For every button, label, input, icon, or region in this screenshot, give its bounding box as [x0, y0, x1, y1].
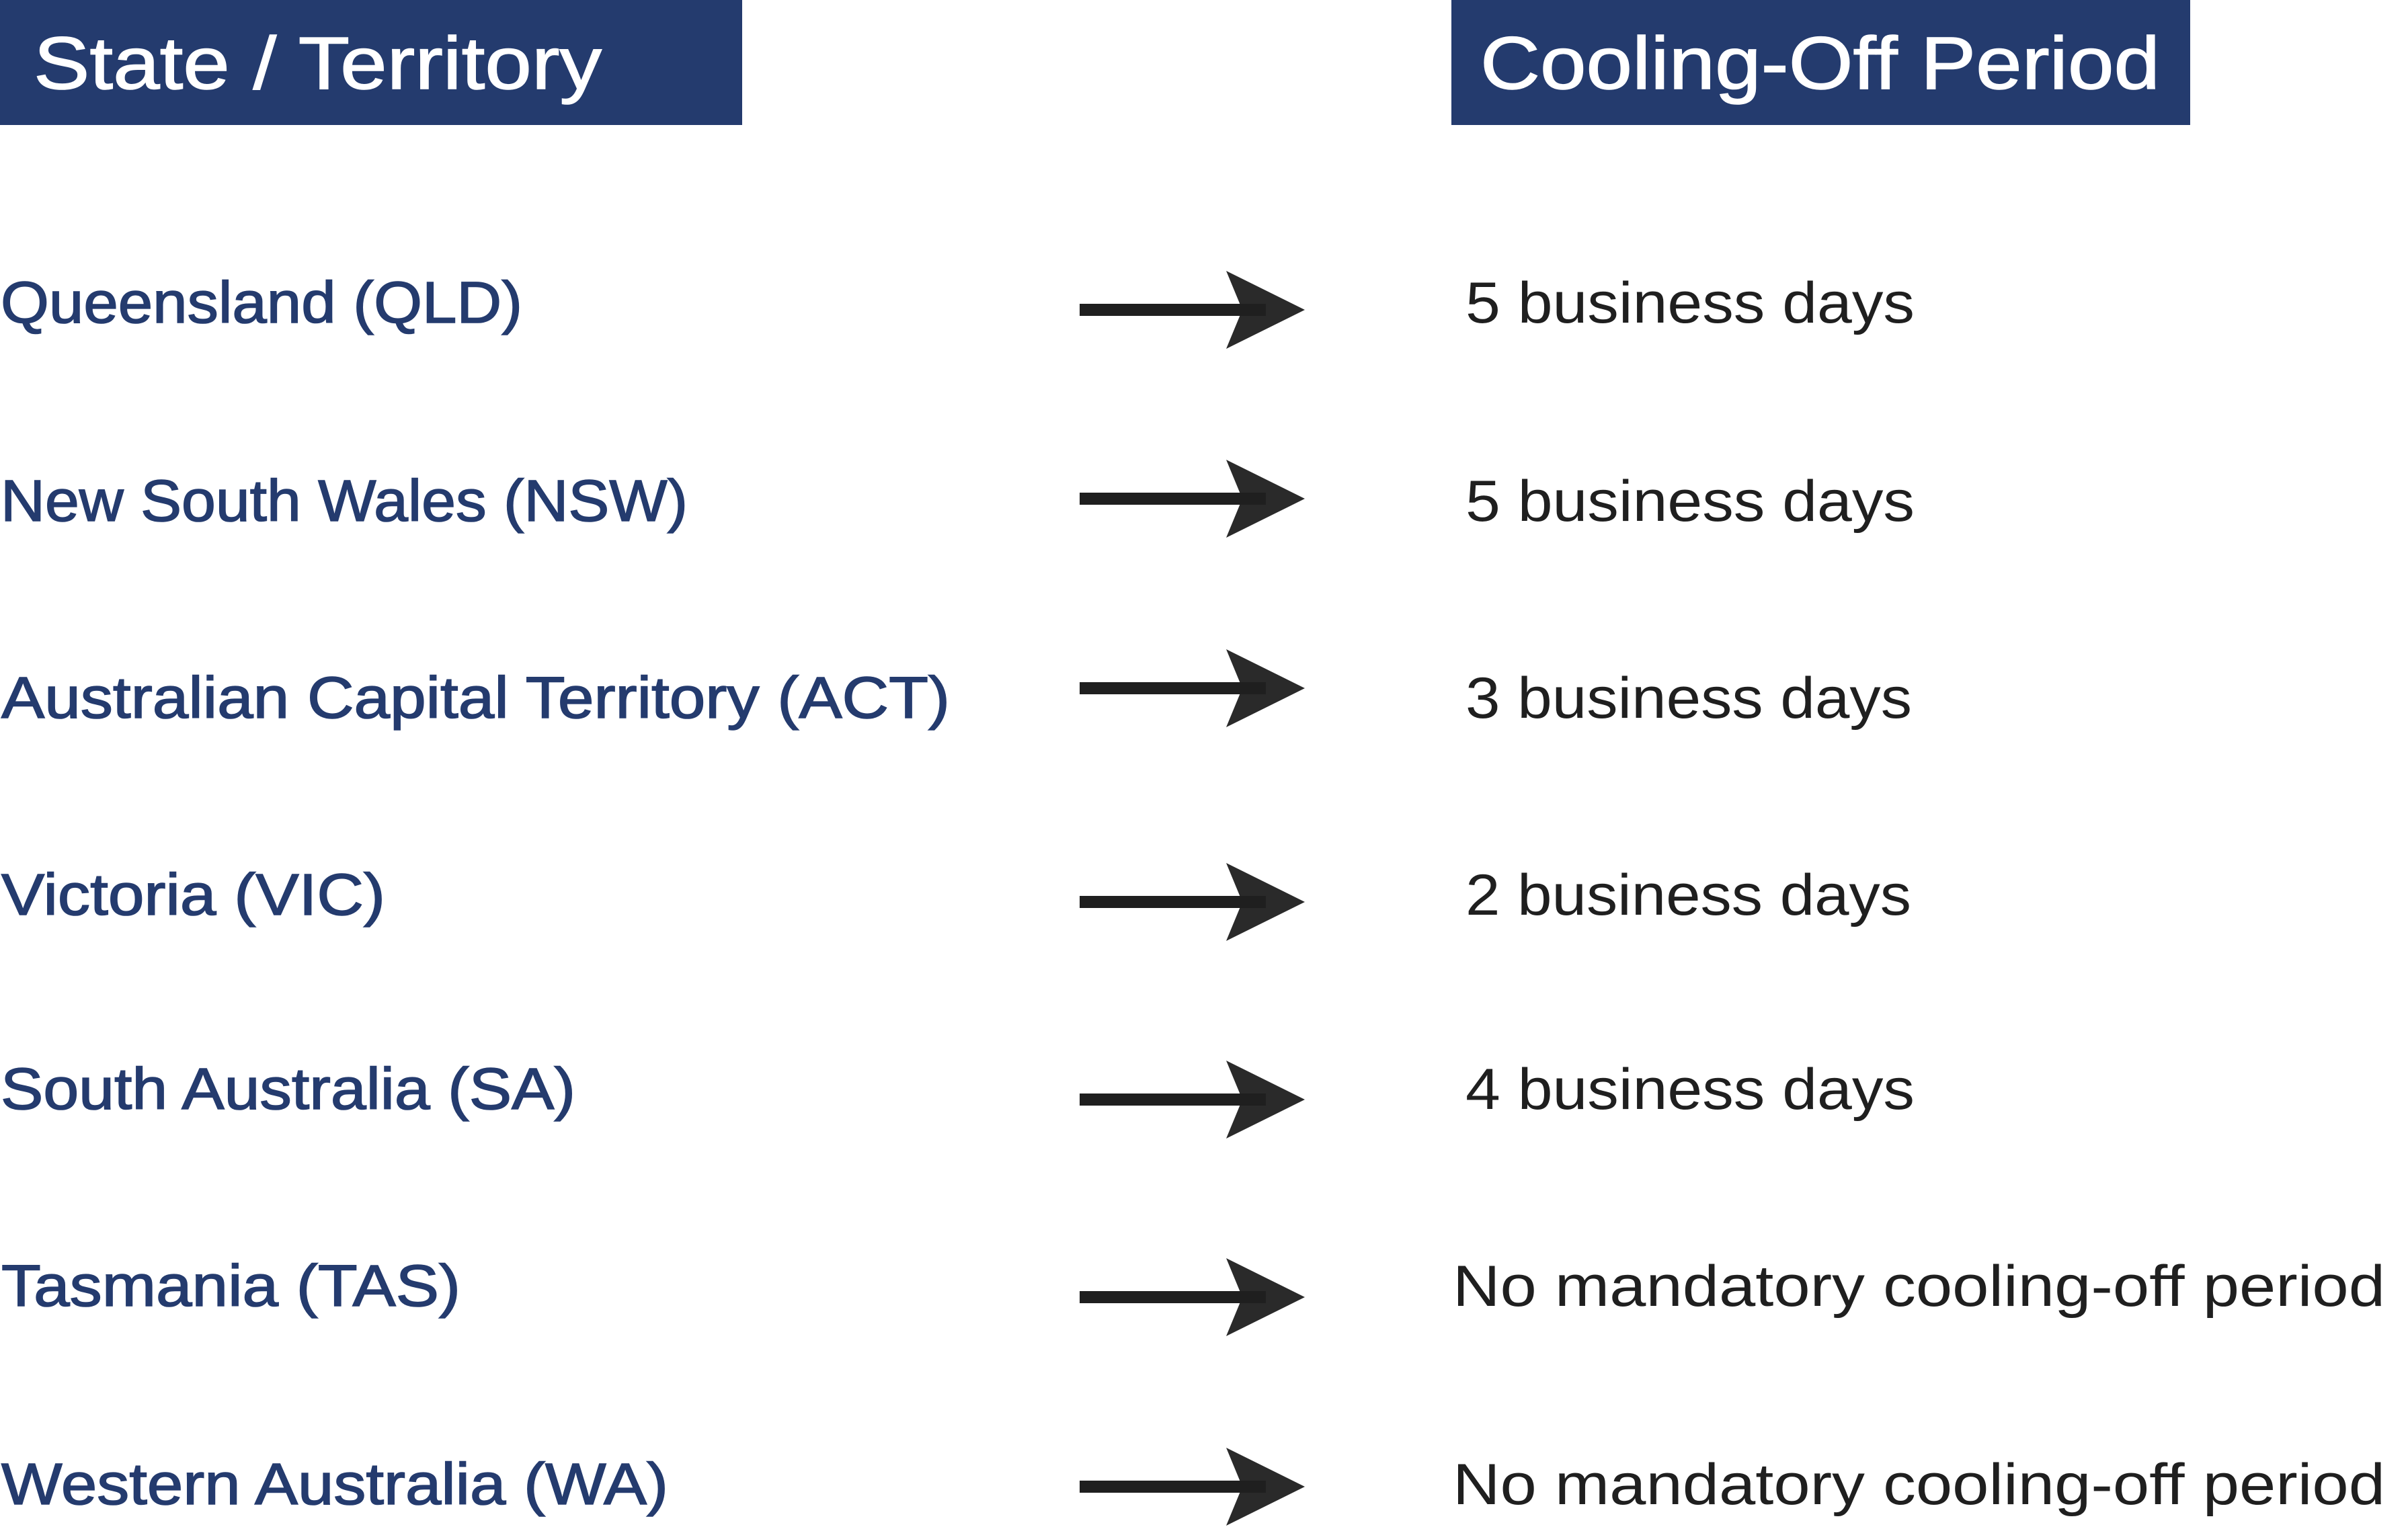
header: Cooling-Off Period — [1451, 0, 2190, 125]
header: Cooling-Off Period: Cooling-Off Period — [1480, 22, 2160, 105]
period: 5 business days: 5 business days — [1466, 469, 1915, 534]
row: New South Wales — [1, 460, 1915, 538]
period: No mandatory cooling-off period: No mandatory cooling-off period — [1453, 1452, 2385, 1517]
arrow: Australian Capital Territory — [1080, 649, 1305, 727]
period: 5 business days: 5 business days — [1466, 271, 1915, 335]
row: Queensland — [1, 270, 1915, 349]
row: South Australia — [1, 1057, 1915, 1139]
arrow: South Australia — [1080, 1061, 1305, 1139]
arrow: Western Australia — [1080, 1448, 1305, 1526]
row: Western Australia — [1, 1448, 2385, 1526]
arrow: Tasmania — [1080, 1258, 1305, 1336]
arrow: New South Wales — [1080, 460, 1305, 538]
state label: Tasmania (TAS): Tasmania (TAS) — [1, 1253, 460, 1319]
period: 4 business days: 4 business days — [1466, 1057, 1915, 1122]
state label: Queensland (QLD): Queensland (QLD) — [1, 270, 522, 335]
state label: South Australia (SA): South Australia (SA) — [1, 1057, 575, 1122]
state label: Western Australia (WA): Western Australia (WA) — [1, 1452, 668, 1517]
state label: Victoria (VIC): Victoria (VIC) — [1, 862, 385, 927]
period: 2 business days: 2 business days — [1466, 863, 1911, 927]
period: 3 business days: 3 business days — [1466, 666, 1912, 731]
row: Victoria — [1, 862, 1911, 941]
row: Tasmania — [1, 1253, 2385, 1336]
state label: Australian Capital Territory (ACT): Australian Capital Territory (ACT) — [1, 665, 950, 731]
period: No mandatory cooling-off period: No mandatory cooling-off period — [1453, 1254, 2385, 1319]
row: Australian Capital Territory — [1, 649, 1912, 731]
arrow: Queensland — [1080, 271, 1305, 349]
header: State / Territory: State / Territory — [34, 22, 602, 105]
arrow: Victoria — [1080, 863, 1305, 941]
state label: New South Wales (NSW): New South Wales (NSW) — [1, 468, 688, 534]
header: State / Territory — [0, 0, 742, 125]
